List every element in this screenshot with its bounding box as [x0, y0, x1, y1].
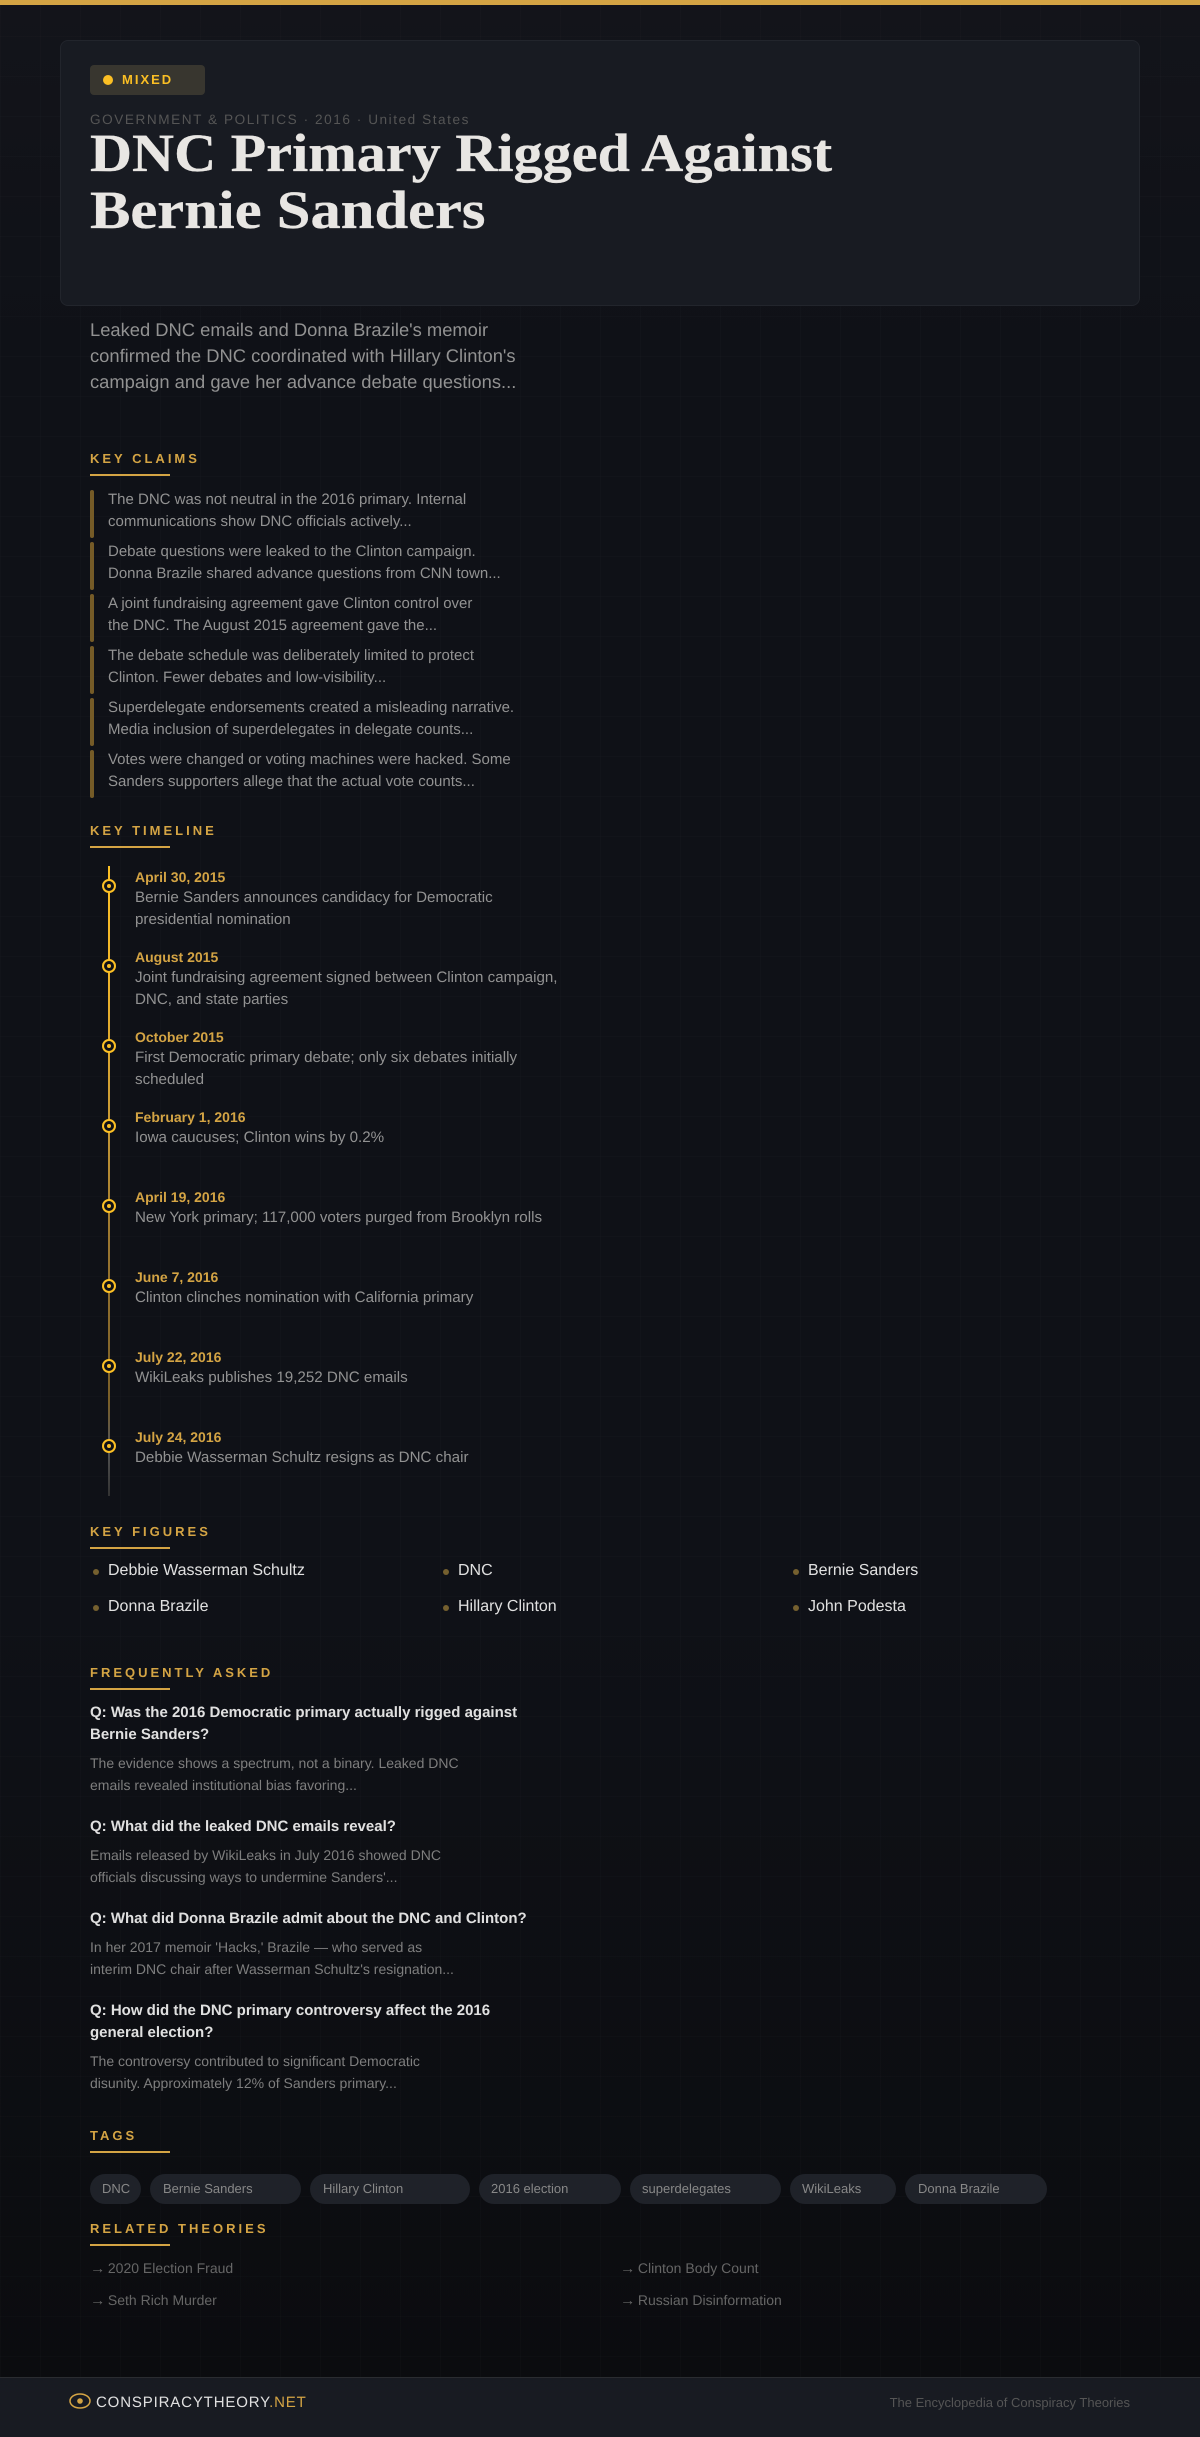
- question 2: Q: What did the leaked DNC emails reveal?: [90, 1818, 396, 1835]
- title: DNC Primary Rigged Against: [90, 123, 832, 183]
- tag: DNC: DNC: [102, 2181, 130, 2196]
- claim 3: A joint fundraising agreement gave Clinton control over: [108, 595, 472, 612]
- event: July 24, 2016: July 24, 2016: [135, 1429, 221, 1445]
- claim 6: Sanders supporters allege that the actual vote counts...: [108, 773, 475, 790]
- claim 5: Media inclusion of superdelegates in delegate counts...: [108, 721, 473, 738]
- figure: John Podesta: John Podesta: [808, 1598, 906, 1615]
- heading: key timeline: KEY TIMELINE: [90, 823, 217, 838]
- tag: Bernie Sanders: [150, 2174, 301, 2204]
- question 4: The controversy contributed to significant Democratic: [90, 2053, 420, 2069]
- panel: key figures: [93, 1562, 918, 1615]
- question 1: The evidence shows a spectrum, not a binary. Leaked DNC: [90, 1755, 459, 1771]
- timeline spine: [108, 866, 110, 1496]
- event: July 22, 2016: [102, 1349, 408, 1386]
- event: August 2015: [102, 949, 558, 1008]
- claim 3: the DNC. The August 2015 agreement gave the...: [108, 617, 437, 634]
- link: Clinton Body Count: →: [620, 2260, 635, 2276]
- heading: frequently asked: FREQUENTLY ASKED: [90, 1665, 273, 1680]
- claim 5: Superdelegate endorsements created a misleading narrative.: [108, 699, 514, 716]
- event: October 2015: October 2015: [135, 1029, 224, 1045]
- question 1: [90, 1704, 517, 1793]
- event: April 30, 2015: [102, 869, 493, 928]
- question 3: interim DNC chair after Wasserman Schultz's resignation...: [90, 1961, 454, 1977]
- verdict badge: mixed: [90, 65, 205, 95]
- link: Russian Disinformation: →: [620, 2292, 635, 2308]
- claim 4: Clinton. Fewer debates and low-visibility...: [108, 669, 386, 686]
- question 3: Q: What did Donna Brazile admit about the DNC and Clinton?: [90, 1910, 527, 1927]
- panel: timeline: [102, 866, 558, 1496]
- badge label: MIXED: [122, 72, 173, 87]
- question 1: Bernie Sanders?: [90, 1726, 209, 1743]
- event: August 2015: DNC, and state parties: [135, 991, 288, 1008]
- question 4: disunity. Approximately 12% of Sanders primary...: [90, 2075, 397, 2091]
- lede summary: [90, 319, 516, 392]
- question 4: [90, 2002, 490, 2091]
- figure: DNC: DNC: [458, 1562, 493, 1579]
- icon: eye logo: [69, 2392, 91, 2410]
- link: 2020 Election Fraud: →: [90, 2260, 105, 2276]
- heading: key claims: KEY CLAIMS: [90, 451, 200, 466]
- link: Clinton Body Count: Clinton Body Count: [638, 2260, 759, 2276]
- tag: 2016 election: [479, 2174, 621, 2204]
- tag: superdelegates: [630, 2174, 781, 2204]
- claim 1: The DNC was not neutral in the 2016 primary. Internal: [108, 491, 466, 508]
- heading: key figures: KEY FIGURES: [90, 1524, 211, 1539]
- figure: DNC: [443, 1562, 493, 1579]
- panel: FAQ: [90, 1704, 527, 2091]
- claim 1: [90, 490, 466, 538]
- event: June 7, 2016: June 7, 2016: [135, 1269, 218, 1285]
- tag: WikiLeaks: [790, 2174, 896, 2204]
- event: August 2015: August 2015: [135, 949, 218, 965]
- claim 6: [90, 750, 511, 798]
- event: April 19, 2016: April 19, 2016: [135, 1189, 225, 1205]
- question 1: Q: Was the 2016 Democratic primary actually rigged against: [90, 1704, 517, 1721]
- claim 4: The debate schedule was deliberately limited to protect: [108, 647, 474, 664]
- question 3: [90, 1910, 527, 1977]
- lede summary: Leaked DNC emails and Donna Brazile's memoir: [90, 319, 488, 340]
- link: Russian Disinformation: Russian Disinformation: [638, 2292, 782, 2308]
- claim 4: [90, 646, 474, 694]
- tag: WikiLeaks: WikiLeaks: [802, 2181, 861, 2196]
- event: July 22, 2016: July 22, 2016: [135, 1349, 221, 1365]
- footer: [0, 2377, 1200, 2437]
- question 1: emails revealed institutional bias favoring...: [90, 1777, 357, 1793]
- question 2: Emails released by WikiLeaks in July 2016 showed DNC: [90, 1847, 441, 1863]
- event: October 2015: scheduled: [135, 1071, 204, 1088]
- claim 5: [90, 698, 514, 746]
- tag: 2016 election: 2016 election: [491, 2181, 568, 2196]
- figure: Bernie Sanders: Bernie Sanders: [808, 1562, 918, 1579]
- question 4: general election?: [90, 2024, 213, 2041]
- title: Bernie Sanders: [90, 180, 486, 240]
- event: July 24, 2016: Debbie Wasserman Schultz resigns as DNC chair: [135, 1449, 468, 1466]
- question 4: Q: How did the DNC primary controversy affect the 2016: [90, 2002, 490, 2019]
- top accent bar: [0, 0, 1200, 5]
- figure: Donna Brazile: Donna Brazile: [108, 1598, 208, 1615]
- panel: tags: [90, 2174, 1047, 2204]
- tag: Bernie Sanders: Bernie Sanders: [163, 2181, 253, 2196]
- claim 2: [90, 542, 501, 590]
- brand wordmark: CONSPIRACYTHEORY.NET: [96, 2394, 307, 2411]
- link: Seth Rich Murder: →: [90, 2292, 105, 2308]
- event: June 7, 2016: [102, 1269, 474, 1306]
- claim 3: [90, 594, 472, 642]
- event: February 1, 2016: February 1, 2016: [135, 1109, 246, 1125]
- lede summary: confirmed the DNC coordinated with Hillary Clinton's: [90, 345, 516, 366]
- tag: Donna Brazile: [905, 2174, 1047, 2204]
- heading: related theories: RELATED THEORIES: [90, 2221, 268, 2236]
- tag: Hillary Clinton: [310, 2174, 470, 2204]
- claim 2: Debate questions were leaked to the Clinton campaign.: [108, 543, 476, 560]
- event: October 2015: [102, 1029, 517, 1088]
- event: February 1, 2016: Iowa caucuses; Clinton wins by 0.2%: [135, 1129, 384, 1146]
- event: August 2015: Joint fundraising agreement signed between Clinton campaign,: [135, 969, 558, 986]
- heading: tags: TAGS: [90, 2128, 137, 2143]
- event: April 30, 2015: April 30, 2015: [135, 869, 225, 885]
- footer tagline: The Encyclopedia of Conspiracy Theories: [890, 2395, 1130, 2410]
- tag: Donna Brazile: Donna Brazile: [918, 2181, 1000, 2196]
- event: April 30, 2015: presidential nomination: [135, 911, 291, 928]
- link: 2020 Election Fraud: 2020 Election Fraud: [108, 2260, 233, 2276]
- link: Seth Rich Murder: Seth Rich Murder: [108, 2292, 217, 2308]
- lede summary: campaign and gave her advance debate questions...: [90, 371, 516, 392]
- tag: DNC: [90, 2174, 141, 2204]
- event: June 7, 2016: Clinton clinches nomination with California primary: [135, 1289, 473, 1306]
- tag: Hillary Clinton: Hillary Clinton: [323, 2181, 403, 2196]
- claim 2: Donna Brazile shared advance questions from CNN town...: [108, 565, 501, 582]
- title: [90, 123, 832, 240]
- event: July 24, 2016: [102, 1429, 468, 1466]
- question 2: officials discussing ways to undermine Sanders'...: [90, 1869, 397, 1885]
- event: July 22, 2016: WikiLeaks publishes 19,252 DNC emails: [135, 1369, 408, 1386]
- claim 6: Votes were changed or voting machines were hacked. Some: [108, 751, 511, 768]
- question 3: In her 2017 memoir 'Hacks,' Brazile — who served as: [90, 1939, 422, 1955]
- figure: Debbie Wasserman Schultz: Debbie Wasserman Schultz: [108, 1562, 305, 1579]
- event: April 19, 2016: New York primary; 117,000 voters purged from Brooklyn rolls: [135, 1209, 542, 1226]
- claim 1: communications show DNC officials actively...: [108, 513, 412, 530]
- event: October 2015: First Democratic primary debate; only six debates initially: [135, 1049, 517, 1066]
- event: April 30, 2015: Bernie Sanders announces candidacy for Democratic: [135, 889, 493, 906]
- link: Seth Rich Murder: [90, 2290, 217, 2310]
- panel: header card: [60, 40, 1140, 306]
- tag: superdelegates: superdelegates: [642, 2181, 731, 2196]
- event: April 19, 2016: [102, 1189, 542, 1226]
- figure: Hillary Clinton: Hillary Clinton: [458, 1598, 557, 1615]
- question 2: [90, 1818, 441, 1885]
- panel: key claims list: [90, 490, 514, 798]
- panel: related theories: [90, 2260, 782, 2308]
- icon: status dot: [103, 75, 113, 85]
- category meta line: GOVERNMENT & POLITICS · 2016 · United States: [90, 112, 470, 127]
- event: February 1, 2016: [102, 1109, 384, 1146]
